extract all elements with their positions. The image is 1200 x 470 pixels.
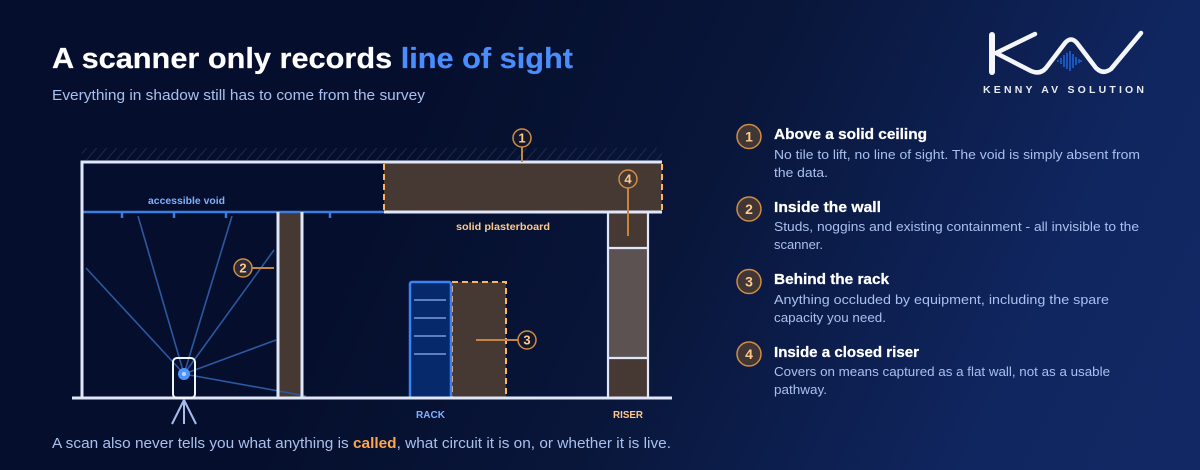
label: accessible void: accessible void [148,195,225,207]
title: A scanner only records line of sight [52,43,573,75]
logo: Kenny AV Solution [983,33,1144,96]
marker 2: 2 [239,260,247,276]
legend item 1: 1 [745,128,753,144]
legend item 3 [737,270,1109,325]
legend item 1: the data. [774,165,828,180]
legend item 2: scanner. [774,237,823,252]
legend item 3: 3 [745,274,753,290]
footer note: A scan also never tells you what anything is called, what circuit it is on, or whether it is live. [52,436,671,452]
legend item 2: Studs, noggins and existing containment - all invisible to the [774,219,1139,234]
shadow behind rack [452,282,506,398]
label: solid plasterboard: solid plasterboard [456,221,550,233]
marker 3 [476,331,536,349]
ceiling slab hatch [82,148,662,160]
legend item 2: 2 [745,201,753,217]
legend item 3: Anything occluded by equipment, including the spare [774,292,1109,307]
diagram: building section [72,129,672,424]
legend item 4: pathway. [774,382,827,397]
marker 3: 3 [523,332,531,348]
label: riser: RISER [613,409,643,421]
structure walls [82,162,662,398]
legend item 2 [737,197,1139,252]
logo: Kenny AV Solution: KENNY AV SOLUTION [983,84,1144,96]
legend item 4: 4 [745,346,753,362]
legend item 1: Above a solid ceiling [774,127,927,143]
scanner on tripod [172,358,196,424]
solid ceiling void [384,163,662,212]
rack [410,282,451,398]
marker 4 [619,170,637,236]
label: rack: RACK [416,409,445,421]
legend item 3: capacity you need. [774,310,886,325]
legend item 1 [737,124,1140,180]
subtitle: Everything in shadow still has to come from the survey [52,88,426,104]
legend item 4: Covers on means captured as a flat wall, not as a usable [774,364,1110,379]
legend item 1: No tile to lift, no line of sight. The void is simply absent from [774,147,1140,162]
accessible ceiling line [83,212,384,218]
scanner rays [86,216,306,396]
legend item 4 [737,342,1110,397]
floor [72,396,672,400]
legend [737,124,1140,397]
marker 1 [513,129,531,162]
dashed sides of solid void [384,164,662,211]
marker 1: 1 [518,130,526,146]
marker 4: 4 [624,172,632,186]
legend item 3: Behind the rack [774,272,890,288]
legend item 2: Inside the wall [774,200,881,216]
legend item 4: Inside a closed riser [774,345,919,361]
marker 2 [234,259,274,277]
wall cavity [278,212,302,398]
riser [608,212,648,398]
